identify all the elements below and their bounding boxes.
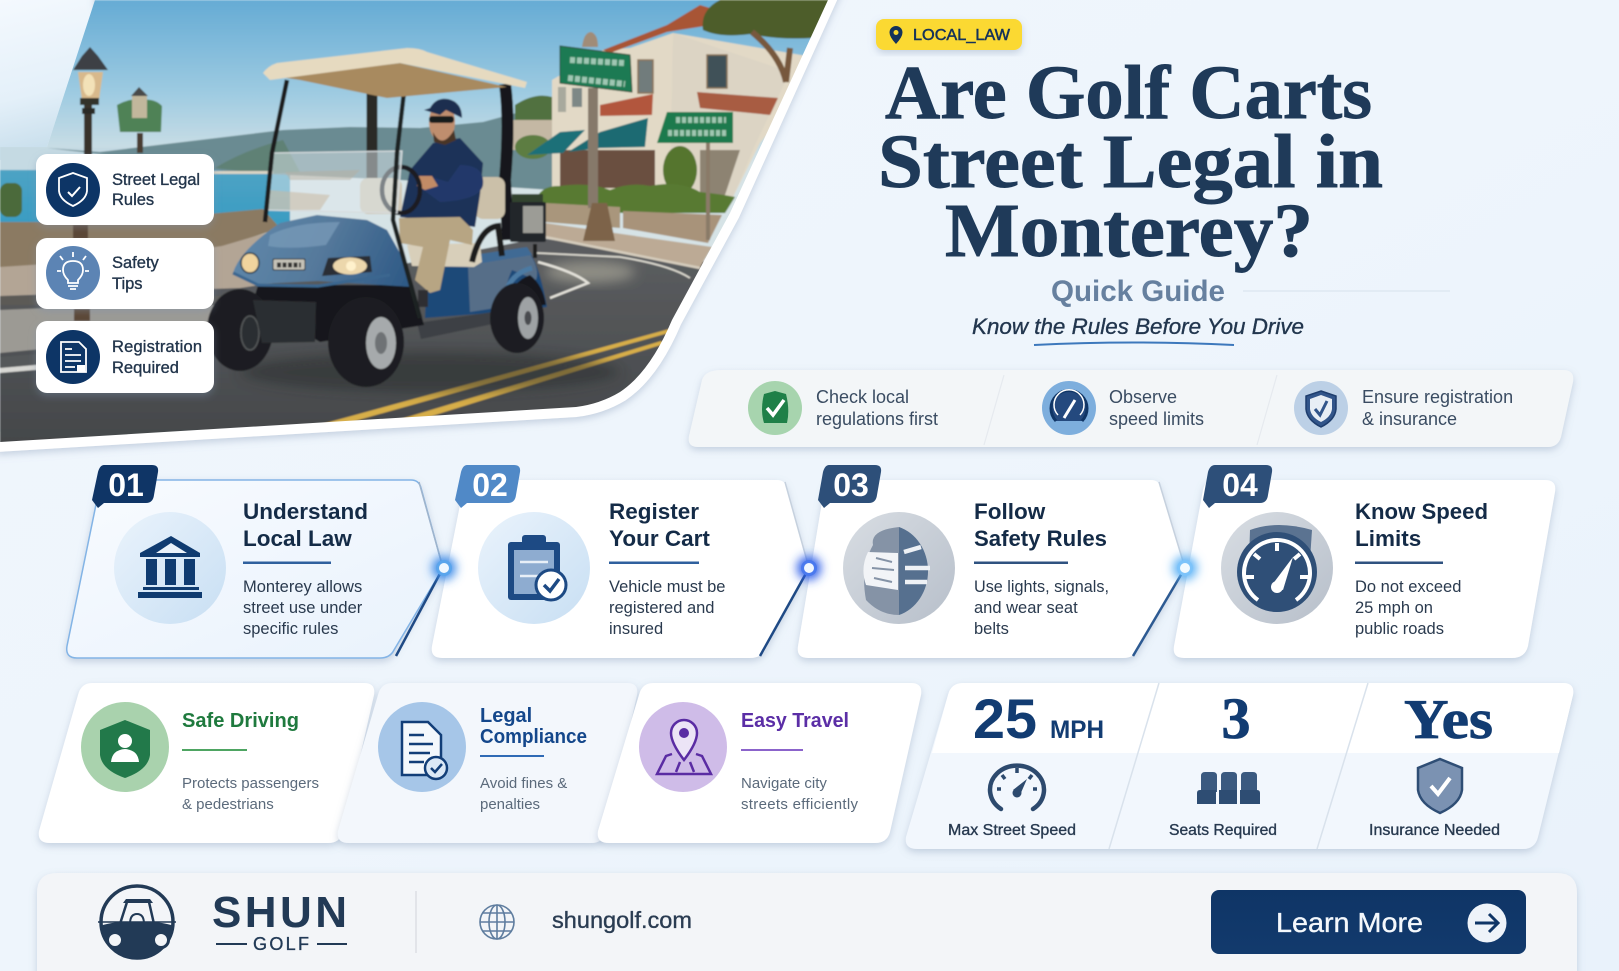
step 3 card: [798, 465, 1185, 658]
sign posts: [588, 88, 598, 208]
stat: 3 seats: 3: [1222, 686, 1250, 751]
icon: speed gauge: [1042, 381, 1096, 435]
badge 04: [1203, 465, 1272, 508]
safe driving text: Protects passengers: [182, 775, 319, 792]
step 4 card: [1174, 465, 1555, 658]
step 4 text: public roads: [1355, 620, 1444, 638]
pill: registration required: Registration: [112, 338, 202, 356]
benefit card: easy travel: [598, 683, 921, 843]
logo: shun golf: SHUN: [212, 888, 347, 937]
step 2 text: Vehicle must be: [609, 578, 725, 596]
pill: street legal rules: Street Legal: [112, 171, 200, 189]
step 1 text: Local Law: [243, 526, 352, 551]
easy travel text: streets efficiently: [741, 796, 858, 813]
step 4 text: Know Speed: [1355, 499, 1488, 524]
badge 03: [818, 465, 881, 508]
icon: map pin: [639, 702, 727, 792]
step 1 text: Monterey allows: [243, 578, 362, 596]
safe driving text: Safe Driving: [182, 709, 299, 732]
hills: [47, 112, 552, 190]
title: [878, 51, 1383, 273]
safe driving text: [182, 709, 319, 813]
step 2 text: Register: [609, 499, 699, 524]
stat: 25 mph: 25: [973, 687, 1037, 750]
easy travel text: Navigate city: [741, 775, 827, 792]
legal compliance text: [480, 705, 587, 813]
step 4 text: Do not exceed: [1355, 578, 1461, 596]
step 2 card: [432, 465, 809, 658]
tag pill: local law: [876, 19, 1022, 50]
stat: yes insurance: [1369, 689, 1500, 839]
legal compliance text: Avoid fines &: [480, 775, 567, 792]
easy travel text: Easy Travel: [741, 710, 849, 732]
tree: [703, 0, 830, 38]
badge 01: 01: [108, 467, 144, 503]
title: Monterey?: [945, 189, 1313, 273]
rear body: [425, 253, 547, 318]
step 1 card: [67, 465, 443, 658]
easy travel text: [741, 710, 858, 813]
wheels rear: [490, 283, 544, 353]
step 3 text: and wear seat: [974, 599, 1078, 617]
pill: registration required: Required: [112, 359, 179, 377]
benefit card: legal compliance: [338, 683, 637, 843]
text: ensure registration: & insurance: [1362, 409, 1457, 429]
badge 04: 04: [1222, 467, 1258, 503]
stat: 3 seats: [1169, 686, 1277, 839]
logo: shun golf: [98, 886, 347, 960]
icon: clipboard: [478, 512, 590, 624]
safe driving text: & pedestrians: [182, 796, 274, 813]
step 1 text: [243, 499, 368, 638]
step 3 text: Follow: [974, 499, 1046, 524]
badge 03: 03: [833, 467, 869, 503]
step 4 text: [1355, 499, 1488, 638]
rear seat + basket: [360, 178, 402, 214]
title: Street Legal in: [878, 120, 1383, 204]
sidewalk right: [545, 223, 712, 267]
step 2 text: registered and: [609, 599, 714, 617]
stat: 25 mph: MPH: [1050, 716, 1104, 744]
shadow under cart: [240, 352, 620, 392]
front under body: [253, 285, 424, 342]
front wheel: [328, 320, 404, 388]
step 2 text: Your Cart: [609, 526, 710, 551]
stat: yes insurance: Yes: [1404, 689, 1493, 751]
badge 02: 02: [472, 467, 508, 503]
info strip: [689, 370, 1573, 447]
step 4 text: Limits: [1355, 526, 1421, 551]
badge 01: [92, 465, 158, 508]
pill: street legal rules: Rules: [112, 191, 154, 209]
stats panel: [906, 683, 1573, 849]
text: check local: Check local: [816, 387, 909, 407]
footer bar: [37, 873, 1577, 971]
bushes: [663, 146, 697, 194]
step 1 text: street use under: [243, 599, 363, 617]
icon: green shield: [81, 702, 169, 792]
icon: document: [378, 702, 466, 792]
icon: shield: [1294, 381, 1348, 435]
pill: safety tips: [36, 238, 214, 309]
legal compliance text: Legal: [480, 705, 532, 727]
text: check local: regulations first: [816, 409, 938, 429]
overlay pills on photo: [36, 154, 214, 393]
struts: [265, 80, 287, 222]
connector nodes: [396, 482, 1197, 656]
step 4 text: 25 mph on: [1355, 599, 1433, 617]
rear struts behind: [366, 90, 378, 178]
logo: shun golf: GOLF: [253, 934, 309, 954]
step 2 text: insured: [609, 620, 663, 638]
icon: green check: [748, 381, 802, 435]
icon: speedometer: [1221, 512, 1333, 624]
icon: courthouse: [114, 512, 226, 624]
pill: safety tips: Tips: [112, 275, 143, 293]
button: learn more: Learn More: [1276, 907, 1423, 938]
stone walls: [623, 211, 722, 243]
tag pill: local law: LOCAL_LAW: [913, 27, 1010, 44]
subtitle: quick guide: Quick Guide: [1051, 275, 1225, 308]
lamps: [84, 105, 92, 155]
pill: street legal rules: [36, 154, 214, 225]
text: observe speed: Observe: [1109, 387, 1177, 407]
icon: globe: [480, 905, 514, 939]
text: ensure registration: Ensure registration: [1362, 387, 1513, 407]
stat: yes insurance: Insurance Needed: [1369, 822, 1500, 839]
step 3 text: Safety Rules: [974, 526, 1107, 551]
title: Are Golf Carts: [885, 51, 1372, 135]
driver: [400, 138, 483, 227]
legal compliance text: Compliance: [480, 726, 587, 748]
step 2 text: [609, 499, 725, 638]
step 3 text: Use lights, signals,: [974, 578, 1109, 596]
windshield: [265, 151, 402, 213]
road: [0, 238, 705, 445]
wall and sidewalk: [0, 209, 280, 268]
icon: headlight: [843, 512, 955, 624]
website text: shungolf.com: [552, 907, 692, 933]
stat: 25 mph: Max Street Speed: [948, 822, 1076, 839]
tagline: Know the Rules Before You Drive: [972, 314, 1304, 339]
benefit card: safe driving: [39, 683, 374, 843]
building: [551, 32, 803, 191]
step 1 text: Understand: [243, 499, 368, 524]
text: observe speed: speed limits: [1109, 409, 1204, 429]
step 3 text: belts: [974, 620, 1009, 638]
pill: registration required: [36, 321, 214, 393]
hero photo: golf cart on coastal street: [0, 0, 860, 460]
step 3 text: [974, 499, 1109, 638]
pill: safety tips: Safety: [112, 254, 160, 272]
stat: 3 seats: Seats Required: [1169, 822, 1277, 839]
legal compliance text: penalties: [480, 796, 540, 813]
badge 02: [455, 465, 520, 508]
step 1 text: specific rules: [243, 620, 338, 638]
button: learn more: [1211, 890, 1526, 954]
seat base and hood: [407, 243, 482, 267]
roof: [280, 63, 507, 98]
stat: 25 mph: [948, 687, 1104, 839]
pale sky corner behind photo: [0, 0, 95, 160]
